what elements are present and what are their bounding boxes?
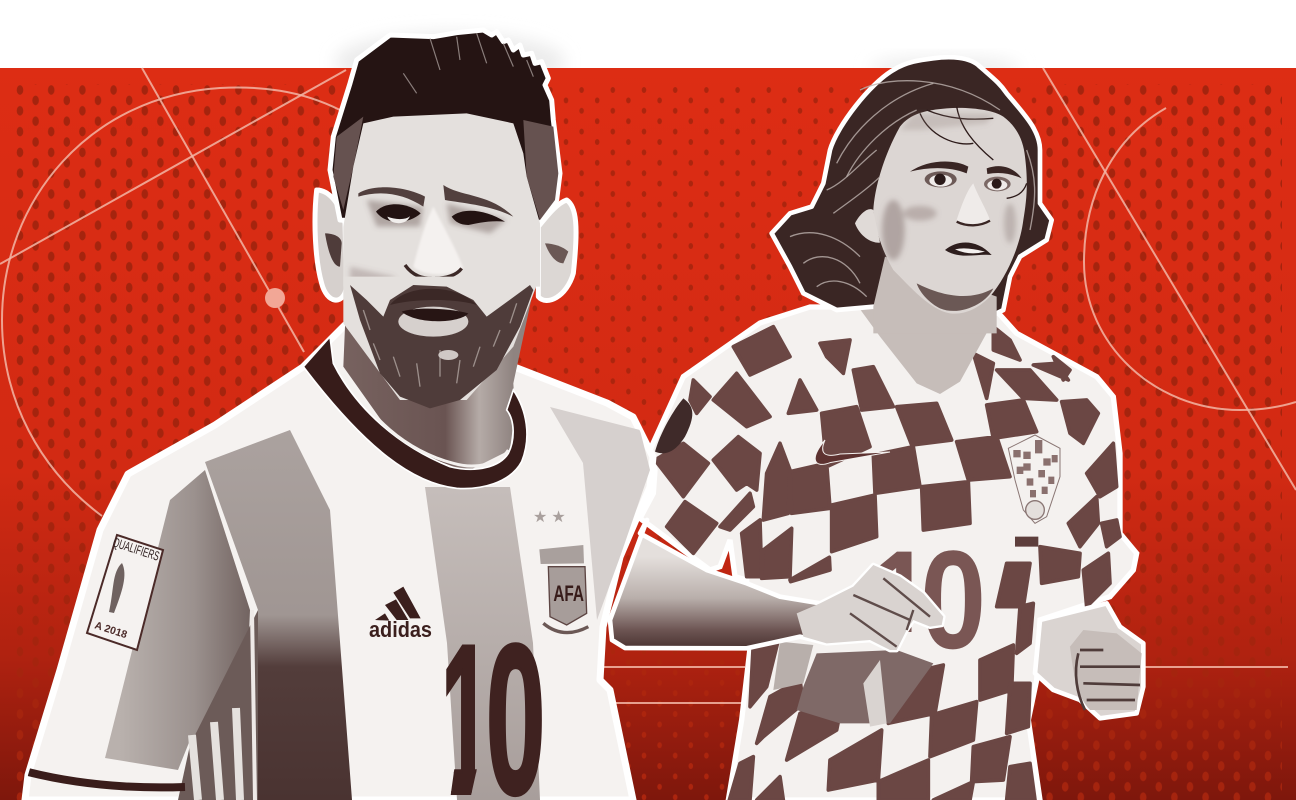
- player: left, Argentina: [25, 30, 653, 800]
- chin highlight: [438, 350, 458, 360]
- finger lines: [850, 578, 930, 647]
- stars: ★★: [533, 509, 570, 526]
- eyes: [925, 171, 957, 187]
- qualifiers sleeve badge: [87, 535, 163, 650]
- head and hair: [772, 57, 1052, 333]
- mouth: [402, 309, 468, 321]
- ears: [315, 190, 347, 300]
- pitch marker dot: [265, 288, 285, 308]
- shirt number: [446, 642, 542, 798]
- pitch lines: [0, 68, 1296, 703]
- shadow and palm fold on the shirt: [797, 650, 933, 723]
- brows: [910, 161, 1022, 178]
- beard highlights: [363, 303, 517, 387]
- inner collar trim: [343, 373, 508, 466]
- nose: [957, 183, 990, 225]
- left arm and hand: [610, 520, 943, 650]
- hair: [330, 30, 560, 233]
- hair side fade: [333, 117, 558, 220]
- player: right, Croatia: [610, 57, 1143, 800]
- adidas logo: [369, 587, 432, 642]
- shirt number: [880, 550, 982, 650]
- head: [315, 30, 576, 301]
- hair strands: [790, 81, 1035, 297]
- jersey body: [25, 325, 653, 800]
- neck: [853, 300, 990, 394]
- lower face and beard: [343, 277, 540, 408]
- shirt number: 1: [870, 521, 932, 678]
- jersey with checks: [640, 307, 1137, 800]
- ear: [855, 209, 880, 243]
- adidas logo: adidas: [369, 617, 432, 642]
- stubble: [917, 283, 993, 311]
- face shading: [882, 113, 1016, 260]
- eyes: [376, 204, 421, 222]
- nose: [413, 207, 463, 274]
- shirt number: 0: [920, 521, 986, 678]
- soft shadow around heads on the white strip: [337, 31, 1010, 68]
- right fist: [1035, 603, 1143, 718]
- qualifiers sleeve badge: A 2018: [93, 619, 129, 641]
- shading: [350, 200, 507, 287]
- face: [343, 113, 540, 287]
- mouth: [945, 242, 992, 256]
- hair highlights: [403, 33, 533, 93]
- jersey stripes and sleeve shading: [28, 407, 650, 800]
- neck: [343, 287, 533, 472]
- qualifiers sleeve badge: QUALIFIERS: [111, 535, 162, 564]
- AFA crest: [539, 545, 588, 633]
- tournament sleeve patch: [655, 398, 692, 453]
- collar: [303, 337, 527, 489]
- brows: [358, 187, 425, 207]
- lips: [398, 307, 468, 337]
- crest: [1008, 435, 1060, 547]
- AFA crest: AFA: [553, 581, 584, 606]
- swoosh logo: [815, 440, 890, 464]
